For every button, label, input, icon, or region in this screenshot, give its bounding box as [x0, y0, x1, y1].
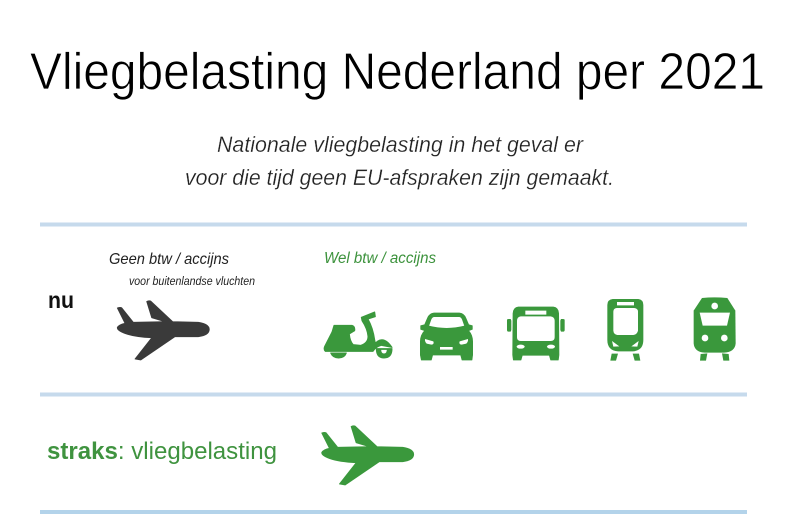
icon: car [420, 313, 473, 360]
subtitle: voor die tijd geen EU-afspraken zijn gemaakt. [185, 165, 614, 190]
icon: dark plane [117, 301, 209, 360]
label: straks vliegbelasting: straks: vliegbelasting [47, 438, 277, 465]
label: nu: nu [48, 287, 74, 313]
icon: green plane [322, 426, 414, 485]
subtitle: Nationale vliegbelasting in het geval er [217, 132, 584, 157]
icon: scooter [324, 312, 392, 358]
label: geen btw / accijns: Geen btw / accijns [109, 251, 229, 268]
subtitle [185, 132, 614, 190]
icon: tram [607, 299, 643, 361]
label: voor buitenlandse vluchten: voor buitenlandse vluchten [129, 276, 255, 288]
icon: bus [507, 307, 565, 360]
icon: train [694, 297, 736, 361]
label: wel btw / accijns: Wel btw / accijns [324, 250, 436, 267]
